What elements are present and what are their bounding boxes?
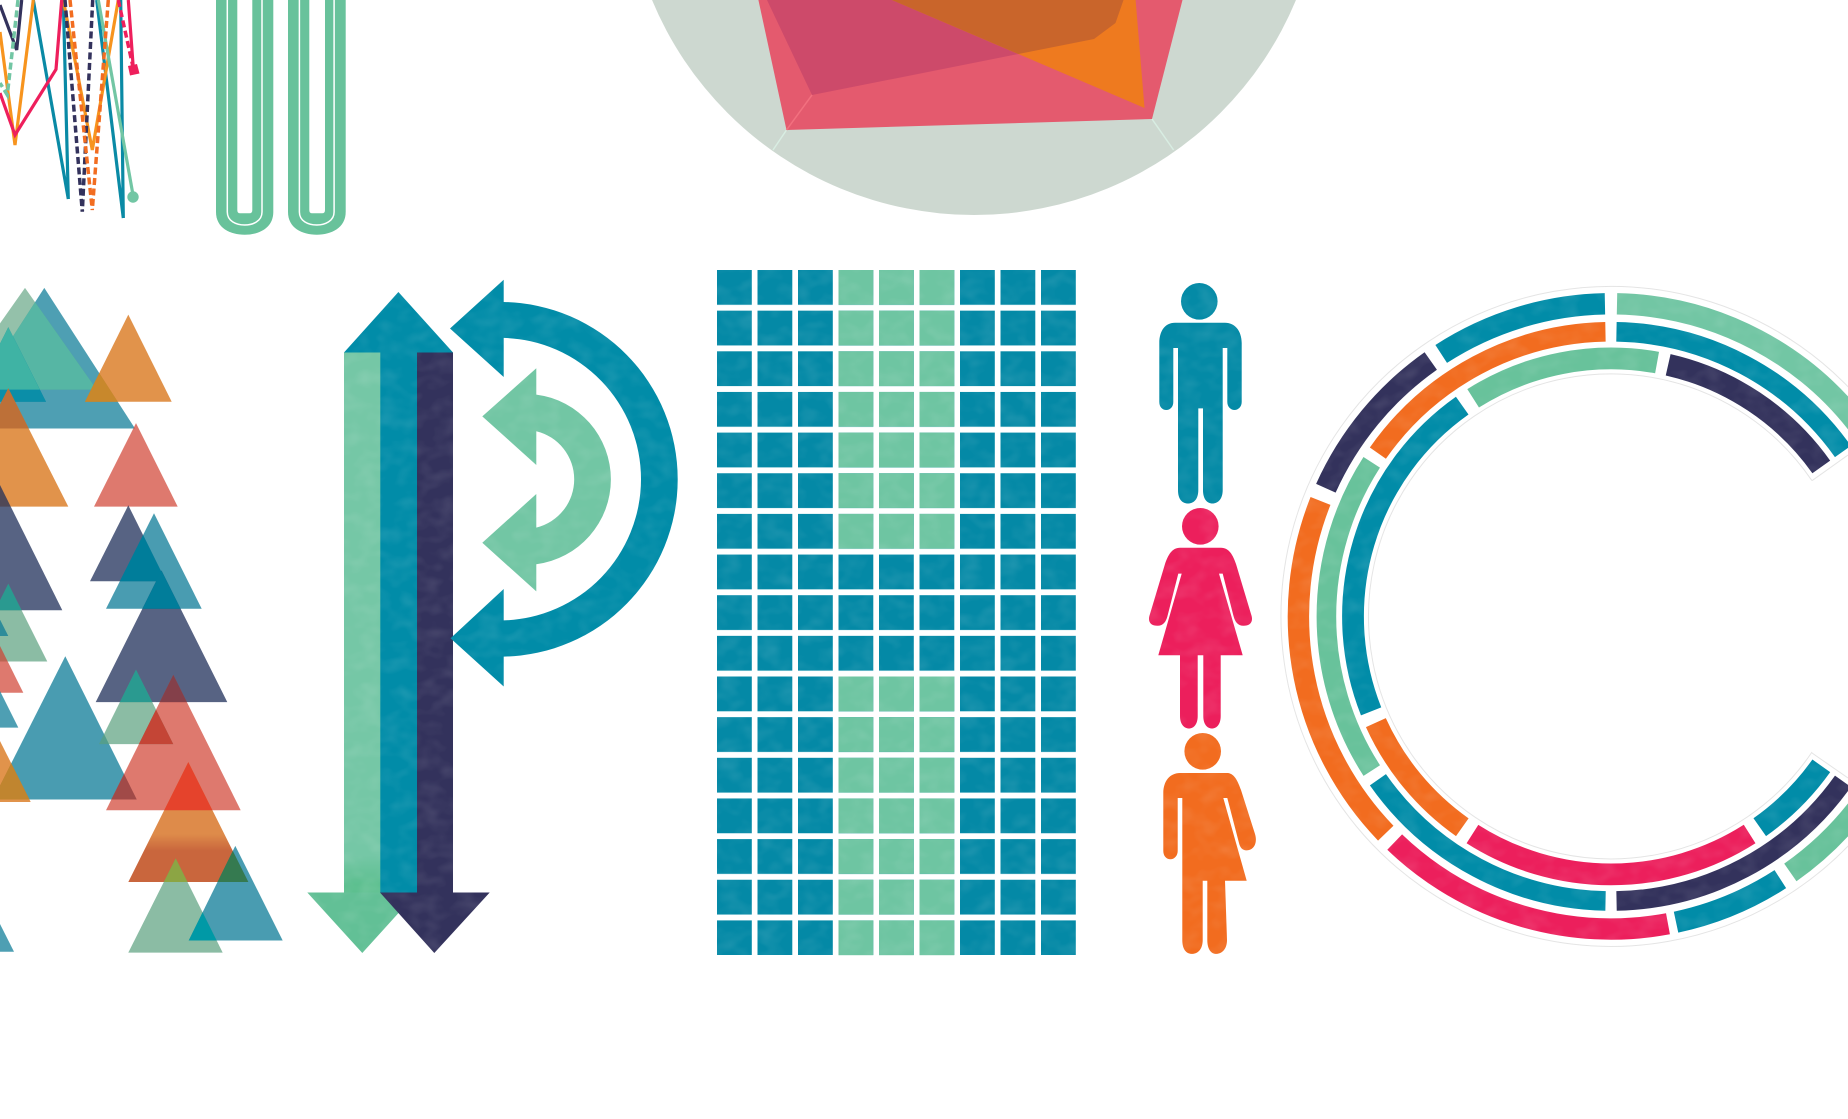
letter P: arrows — [307, 280, 678, 953]
grid: lower green block — [838, 676, 960, 961]
radar chart: circle with overlapping polygons — [625, 0, 1323, 215]
icon: green U tube one — [216, 0, 273, 235]
arrow: teal upward — [344, 292, 453, 892]
icon: green U tube two — [288, 0, 346, 235]
ring: inner band — [1251, 257, 1848, 976]
arrow: green downward — [307, 352, 417, 953]
arrow: teal curved two-headed — [450, 280, 678, 686]
icon: man figure — [1159, 283, 1242, 504]
letter I: waffle grid — [717, 270, 1077, 961]
ring: middle band — [1214, 220, 1848, 1013]
icon: woman figure — [1149, 508, 1252, 728]
arrow: green curved two-headed — [482, 368, 611, 591]
letter C: segmented ring chart — [1151, 157, 1848, 1076]
grid: upper green block — [838, 270, 960, 554]
arrow: navy downward — [380, 352, 490, 953]
letter A: overlapping triangles — [0, 288, 283, 953]
line chart: letter fragment top left — [0, 0, 140, 218]
ring: outer band — [1169, 174, 1848, 1058]
icon: mixed figure — [1163, 733, 1256, 954]
